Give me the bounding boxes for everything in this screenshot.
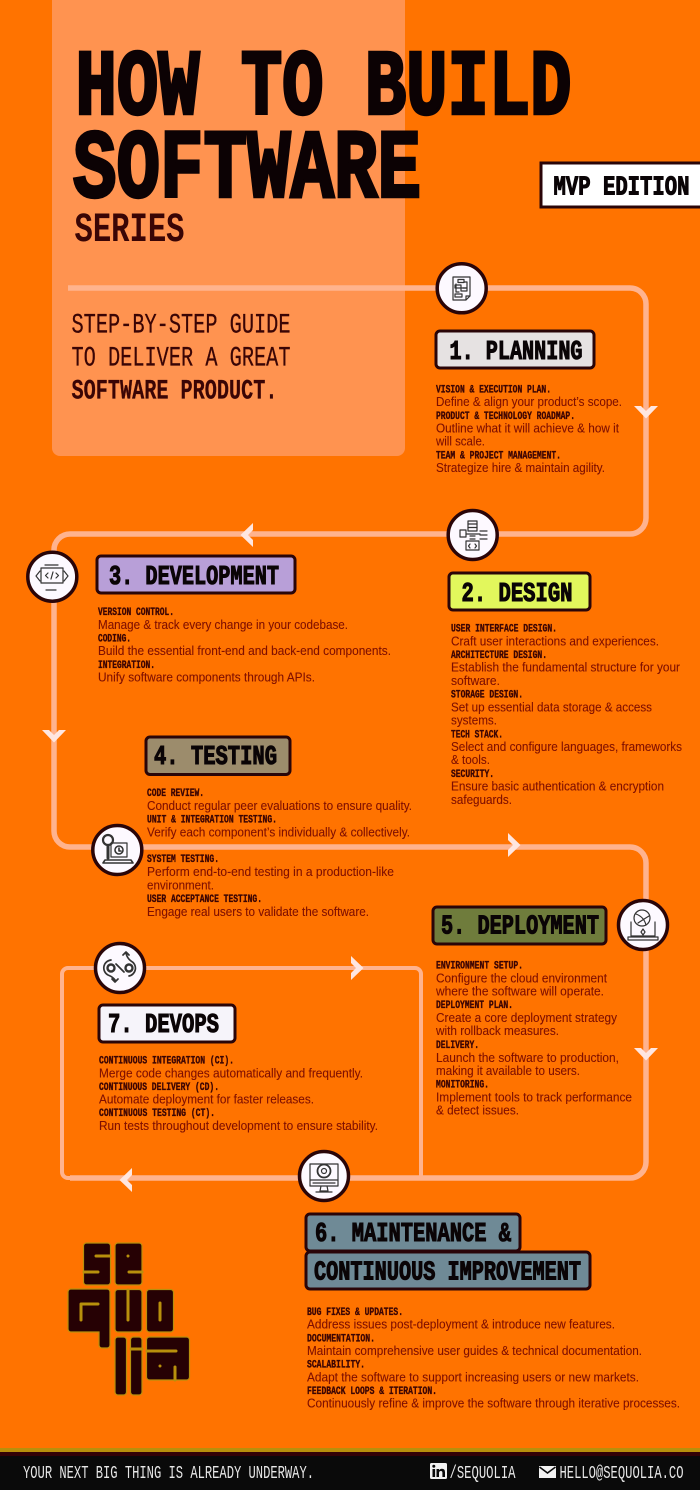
- icon: design architecture: [448, 510, 497, 560]
- text block: planning details: Strategize hire & maintain agility.: [436, 461, 605, 475]
- icon: maintenance monitor gear: [300, 1152, 348, 1200]
- arrow: down deployment: [634, 1048, 658, 1060]
- text block: testing details: Conduct regular peer evaluations to ensure quality.: [147, 799, 412, 813]
- heading: 2. design: 2. DESIGN: [462, 579, 572, 609]
- arrow: down planning: [634, 406, 658, 418]
- text block: development details: Manage & track every change in your codebase.: [98, 618, 348, 632]
- text block: deployment details: & detect issues.: [436, 1104, 519, 1118]
- text block: maintenance details: BUG FIXES & UPDATES.: [307, 1307, 403, 1319]
- text block: maintenance details: DOCUMENTATION.: [307, 1334, 375, 1346]
- tagline: STEP-BY-STEP GUIDE: [72, 310, 290, 342]
- flow path: devops loop: [62, 968, 421, 1178]
- text block: planning details: Define & align your product’s scope.: [436, 395, 622, 409]
- text block: maintenance details: [307, 1307, 680, 1410]
- text block: maintenance details: Adapt the software to support increasing users or new markets.: [307, 1370, 639, 1384]
- heading: 7. devops: [99, 1005, 235, 1042]
- text block: devops details: Merge code changes automatically and frequently.: [99, 1066, 363, 1080]
- text block: deployment details: DEPLOYMENT PLAN.: [436, 1000, 513, 1012]
- text block: development details: VERSION CONTROL.: [98, 607, 174, 619]
- text block: maintenance details: Maintain comprehensive user guides & technical documentation.: [307, 1344, 642, 1358]
- arrow: down development: [42, 730, 66, 742]
- title: [73, 36, 572, 254]
- text block: testing details: [147, 788, 412, 919]
- text block: devops details: CONTINUOUS TESTING (CT).: [99, 1108, 215, 1120]
- text block: maintenance details: FEEDBACK LOOPS & ITERATION.: [307, 1386, 437, 1398]
- text block: testing details: USER ACCEPTANCE TESTING.: [147, 894, 262, 906]
- text block: planning details: [435, 384, 622, 475]
- text block: devops details: CONTINUOUS INTEGRATION (CI).: [99, 1056, 234, 1068]
- text block: devops details: [99, 1056, 378, 1133]
- text block: planning details: Outline what it will achieve & how it: [436, 422, 619, 436]
- text block: design details: & tools.: [451, 753, 490, 767]
- text block: planning details: TEAM & PROJECT MANAGEMENT.: [436, 450, 561, 462]
- arrow: left design: [240, 523, 253, 547]
- title: SERIES: [74, 206, 184, 254]
- text block: maintenance details: Address issues post-deployment & introduce new features.: [307, 1318, 615, 1332]
- text block: planning details: VISION & EXECUTION PLAN.: [436, 384, 551, 396]
- text block: design details: Establish the fundamental structure for your: [451, 660, 680, 674]
- text block: design details: Set up essential data storage & access: [451, 700, 652, 714]
- heading: 4. testing: 4. TESTING: [154, 742, 277, 772]
- text block: planning details: PRODUCT & TECHNOLOGY ROADMAP.: [436, 411, 575, 423]
- text block: design details: [451, 624, 682, 807]
- heading: 1. planning: [436, 331, 594, 368]
- text block: devops details: Run tests throughout development to ensure stability.: [99, 1119, 378, 1133]
- flow path: main route: [54, 288, 646, 1178]
- heading: 5. deployment: 5. DEPLOYMENT: [441, 912, 599, 942]
- arrow: left maintenance: [120, 1168, 132, 1192]
- text block: design details: TECH STACK.: [451, 730, 503, 742]
- icon: development code: [28, 552, 77, 601]
- arrow: right devops: [351, 956, 364, 980]
- heading: 6. maintenance and continuous improvement: [306, 1214, 590, 1289]
- footer linkedin handle: /SEQUOLIA: [450, 1463, 516, 1484]
- text block: design details: USER INTERFACE DESIGN.: [451, 624, 557, 636]
- text block: testing details: CODE REVIEW.: [147, 788, 204, 800]
- heading: 3. development: 3. DEVELOPMENT: [109, 562, 279, 592]
- text block: deployment details: Implement tools to track performance: [436, 1090, 632, 1104]
- text block: development details: Unify software components through APIs.: [98, 670, 315, 684]
- text block: devops details: CONTINUOUS DELIVERY (CD).: [99, 1082, 219, 1094]
- icon: mail: [539, 1466, 556, 1478]
- text block: deployment details: Configure the cloud environment: [436, 972, 607, 986]
- text block: deployment details: Launch the software to production,: [436, 1051, 619, 1065]
- icon: linkedin: [430, 1463, 447, 1479]
- text block: design details: systems.: [451, 714, 497, 728]
- text block: deployment details: Create a core deployment strategy: [436, 1011, 618, 1025]
- text block: design details: SECURITY.: [451, 769, 494, 781]
- heading: 2. design: [449, 573, 590, 610]
- text block: deployment details: [435, 960, 632, 1118]
- tagline: [72, 310, 290, 408]
- tagline: TO DELIVER A GREAT: [72, 344, 290, 374]
- heading: 4. testing: [146, 737, 290, 774]
- heading: 5. deployment: [433, 907, 606, 944]
- heading: 3. development: [97, 556, 295, 593]
- step 4: testing: [146, 737, 412, 919]
- text block: testing details: UNIT & INTEGRATION TESTING.: [147, 814, 277, 826]
- panel: title backdrop: [52, 0, 405, 456]
- text block: design details: Ensure basic authentication & encryption: [451, 780, 664, 794]
- title: SOFTWARE: [73, 116, 421, 226]
- step 7: devops: [99, 1005, 378, 1133]
- text block: maintenance details: Continuously refine & improve the software through iterative processes.: [307, 1396, 680, 1410]
- text block: design details: Craft user interactions and experiences.: [451, 634, 659, 648]
- step 2: design: [449, 573, 682, 807]
- text block: planning details: will scale.: [435, 434, 485, 448]
- text block: testing details: environment.: [147, 878, 214, 892]
- text block: design details: STORAGE DESIGN.: [451, 690, 523, 702]
- heading: 6. maintenance and continuous improvement: CONTINUOUS IMPROVEMENT: [314, 1258, 581, 1288]
- text block: design details: Select and configure languages, frameworks: [451, 740, 682, 754]
- footer tagline: YOUR NEXT BIG THING IS ALREADY UNDERWAY.: [23, 1463, 314, 1484]
- text block: testing details: Verify each component’s individually & collectively.: [147, 826, 410, 840]
- heading: 7. devops: 7. DEVOPS: [108, 1010, 219, 1040]
- text block: deployment details: MONITORING.: [436, 1080, 489, 1092]
- text block: deployment details: where the software will operate.: [435, 984, 604, 998]
- text block: development details: INTEGRATION.: [98, 660, 155, 672]
- step 3: development: [97, 556, 391, 684]
- text block: design details: software.: [451, 674, 500, 688]
- text block: devops details: Automate deployment for faster releases.: [99, 1092, 314, 1106]
- step 5: deployment: [433, 907, 632, 1118]
- icon: planning flowchart: [437, 264, 486, 313]
- heading: 1. planning: 1. PLANNING: [450, 337, 582, 367]
- tagline: SOFTWARE PRODUCT.: [72, 376, 278, 408]
- arrow: right testing: [508, 833, 520, 857]
- text block: design details: safeguards.: [451, 793, 512, 807]
- footer bar: [0, 1448, 700, 1490]
- text block: deployment details: DELIVERY.: [436, 1040, 479, 1052]
- step 1: planning: [435, 331, 622, 475]
- logo: sequolia: [68, 1243, 190, 1395]
- text block: testing details: SYSTEM TESTING.: [147, 854, 219, 866]
- text block: testing details: Engage real users to validate the software.: [147, 905, 369, 919]
- icon: deployment cloud laptop: [618, 900, 668, 950]
- text block: deployment details: with rollback measures.: [435, 1024, 559, 1038]
- text block: deployment details: ENVIRONMENT SETUP.: [436, 960, 523, 972]
- step 6: maintenance: [306, 1214, 680, 1410]
- heading: 6. maintenance and continuous improvement: 6. MAINTENANCE &: [315, 1219, 511, 1249]
- text block: testing details: Perform end-to-end testing in a production-like: [147, 865, 394, 879]
- text block: deployment details: making it available to users.: [436, 1064, 580, 1078]
- text block: design details: ARCHITECTURE DESIGN.: [451, 650, 547, 662]
- text block: maintenance details: SCALABILITY.: [307, 1360, 365, 1372]
- text block: development details: [98, 607, 391, 684]
- icon: testing magnifier and laptop: [93, 826, 142, 874]
- icon: devops gears loop: [96, 944, 144, 992]
- badge: MVP edition: [541, 163, 700, 207]
- text block: development details: Build the essential front-end and back-end components.: [98, 644, 391, 658]
- text block: development details: CODING.: [98, 634, 131, 646]
